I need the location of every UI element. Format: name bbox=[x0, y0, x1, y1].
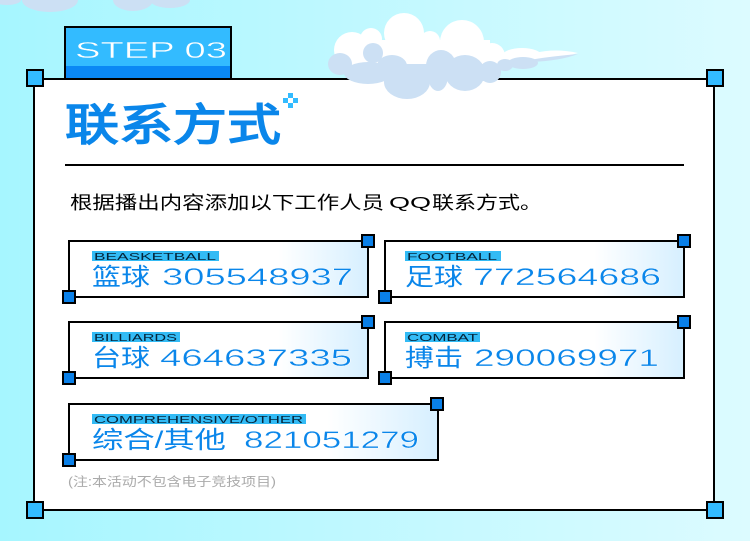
card: football: 足球 bbox=[405, 264, 463, 291]
card: comprehensive / other bbox=[63, 398, 443, 466]
intro text bbox=[70, 193, 542, 213]
card: combat bbox=[379, 316, 690, 384]
card: basketball: 305548937 bbox=[162, 264, 353, 291]
card: football bbox=[379, 235, 690, 303]
intro text: 联系方式。 bbox=[432, 193, 542, 213]
sparkle icon bbox=[283, 93, 298, 108]
step tab bbox=[65, 27, 231, 79]
card: comprehensive / other: COMPREHENSIVE/OTHER bbox=[94, 414, 304, 426]
card: basketball: BEASKETBALL bbox=[94, 251, 216, 263]
main panel bbox=[34, 79, 714, 510]
corner marker bottom right bbox=[707, 502, 723, 518]
title: 联系方式 bbox=[65, 101, 281, 150]
card: billiards bbox=[63, 316, 374, 384]
cloud top centre bbox=[328, 13, 578, 99]
corner marker bottom left bbox=[27, 502, 43, 518]
card: billiards: 台球 bbox=[92, 345, 150, 372]
corner marker top right bbox=[707, 70, 723, 86]
card: billiards: BILLIARDS bbox=[94, 332, 177, 344]
card: basketball bbox=[63, 235, 374, 303]
divider bbox=[65, 164, 684, 166]
clouds top left bbox=[0, 0, 190, 12]
card: comprehensive / other: 综合/其他 bbox=[92, 427, 226, 454]
footnote: (注:本活动不包含电子竞技项目) bbox=[68, 474, 276, 489]
card: basketball: 篮球 bbox=[92, 264, 150, 291]
card: billiards: 464637335 bbox=[160, 345, 352, 372]
intro text: 根据播出内容添加以下工作人员 bbox=[70, 193, 384, 213]
card: football: 772564686 bbox=[473, 264, 661, 291]
card: combat: 搏击 bbox=[405, 345, 463, 372]
intro text: QQ bbox=[389, 195, 431, 212]
card: comprehensive / other: 821051279 bbox=[244, 427, 419, 454]
step tab: STEP 03 bbox=[75, 37, 227, 63]
corner marker top left bbox=[27, 70, 43, 86]
card: football: FOOTBALL bbox=[407, 251, 497, 263]
card: combat: 290069971 bbox=[474, 345, 659, 372]
card: combat: COMBAT bbox=[407, 332, 479, 344]
